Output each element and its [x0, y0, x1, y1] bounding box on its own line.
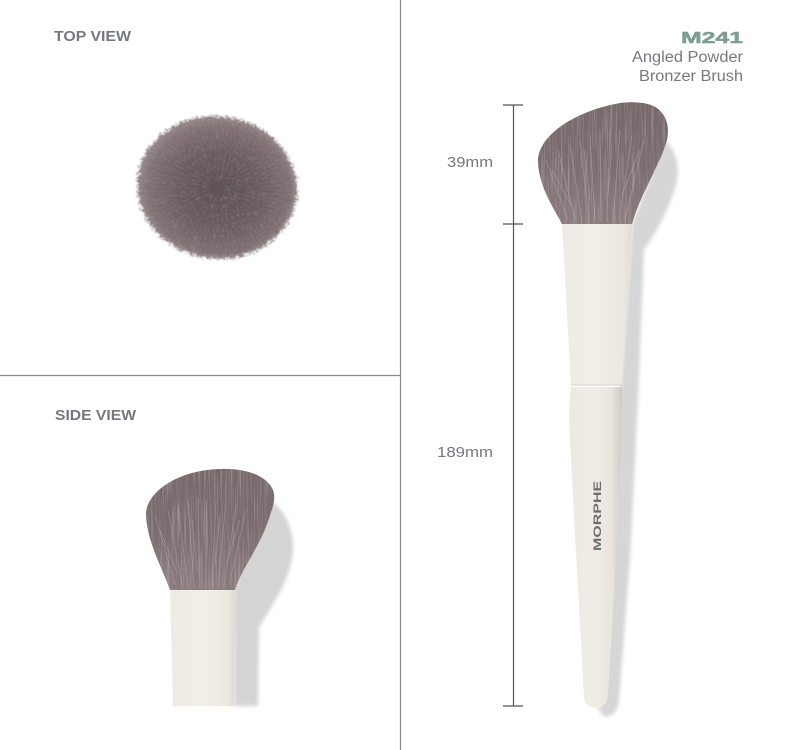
product name line two: Bronzer Brush	[639, 68, 743, 85]
icon: side view brush	[140, 465, 293, 706]
side view bristles	[146, 468, 274, 590]
panel dividers	[0, 0, 400, 750]
product code: M241	[681, 30, 743, 47]
handle seam	[571, 384, 622, 386]
dimension bracket	[503, 105, 523, 706]
side view shadow	[234, 502, 293, 706]
product title block	[632, 30, 743, 85]
logo text on handle: MORPHE	[592, 481, 604, 551]
lower handle	[569, 387, 622, 708]
product name line one: Angled Powder	[632, 49, 743, 66]
heading: side view: SIDE VIEW	[55, 408, 136, 424]
brush head bristles	[538, 102, 668, 224]
upper handle	[562, 224, 632, 384]
heading: top view: TOP VIEW	[54, 29, 131, 45]
side view handle	[170, 590, 235, 706]
label: handle length: 189mm	[437, 444, 493, 461]
brush shadow	[598, 140, 678, 716]
icon: full brush	[530, 98, 678, 716]
label: bristle length: 39mm	[447, 154, 493, 171]
icon: brush top view bristles	[129, 107, 305, 268]
